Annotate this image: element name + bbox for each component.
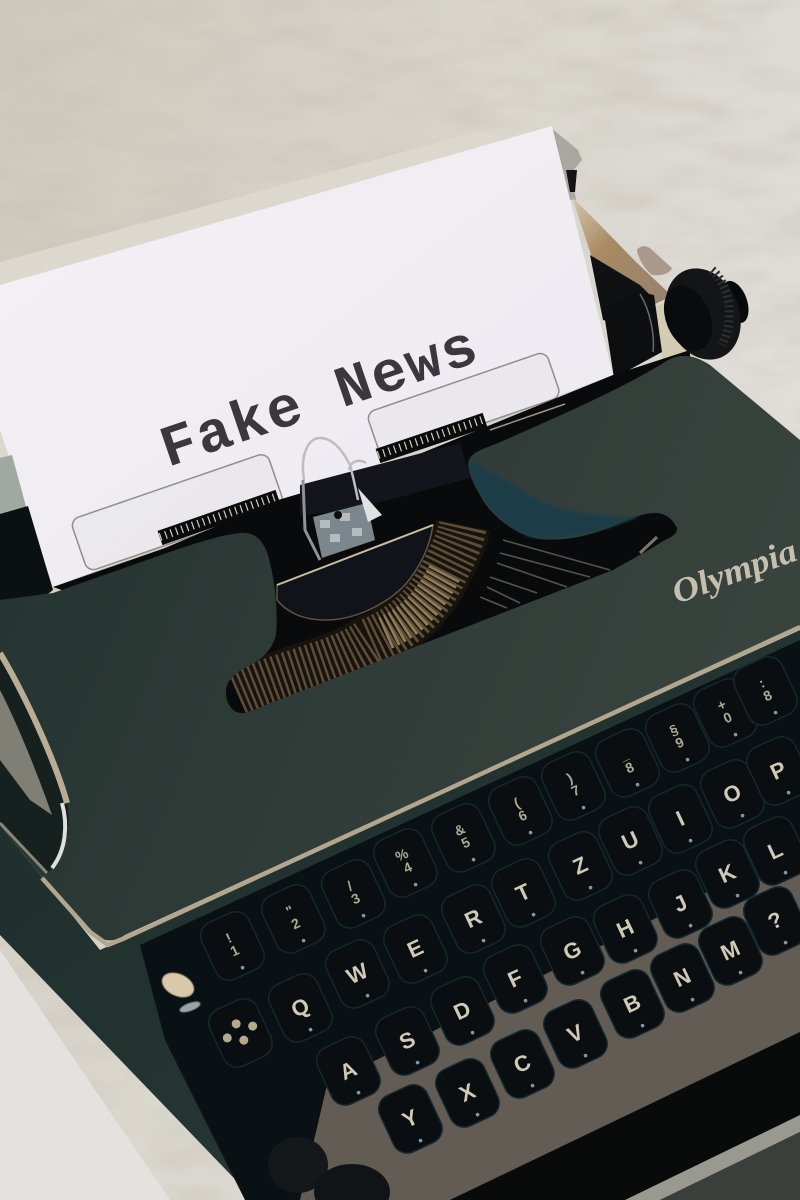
silver paper clip — [303, 438, 382, 560]
keyboard keys: K — [715, 859, 740, 888]
keyboard keys: ( — [511, 794, 522, 811]
keyboard keys: 8 — [623, 758, 637, 776]
keyboard keys: : — [756, 675, 767, 691]
keyboard keys: § — [667, 721, 681, 739]
paper bail combs — [160, 497, 278, 538]
keyboard keys: / — [344, 878, 355, 894]
keyboard keys: H — [613, 914, 638, 943]
keyboard keys: 4 — [401, 858, 415, 876]
number row: ! — [223, 930, 234, 946]
keyboard keys: Z — [569, 851, 592, 880]
keyboard keys: S — [395, 1026, 419, 1055]
lower left keys — [268, 1137, 390, 1200]
keyboard keys: J — [669, 890, 691, 917]
type basket inner plate — [277, 525, 433, 620]
space bar — [450, 1032, 800, 1200]
opening: type basket well — [53, 350, 690, 730]
keyboard keys: D — [450, 996, 475, 1025]
shift lever highlight, left side — [158, 968, 202, 1015]
type bars on the right — [480, 540, 610, 608]
keyboard well — [140, 640, 800, 1200]
platen knob — [652, 257, 754, 371]
keyboard keys: _ — [616, 746, 631, 764]
keyboard keys: P — [766, 756, 790, 785]
keyboard keys: L — [764, 836, 787, 865]
keyboard keys: 9 — [673, 733, 687, 751]
chrome trim strip — [42, 627, 800, 945]
number row — [196, 907, 269, 985]
keyboard keys: ? — [764, 906, 787, 935]
keyboard keys: 7 — [569, 781, 583, 799]
keyboard keys: % — [393, 845, 411, 865]
keyboard keys: 6 — [516, 806, 530, 824]
bottom row — [374, 1080, 447, 1158]
keyboard keys: N — [670, 963, 695, 992]
keyboard keys: Q — [287, 993, 313, 1022]
keyboard keys: 0 — [721, 708, 735, 726]
bottom row: Y — [398, 1104, 422, 1133]
black bail bar — [300, 443, 470, 515]
keyboard keys: W — [343, 958, 372, 989]
paper sheet — [0, 126, 613, 587]
paper guide right — [366, 351, 561, 458]
keyboard keys: " — [283, 902, 296, 919]
cream bracket — [652, 299, 694, 360]
keyboard keys: M — [717, 935, 744, 966]
keyboard keys: I — [672, 806, 688, 831]
chrome latch — [637, 246, 672, 275]
keyboard keys: G — [559, 936, 585, 965]
keyboard keys: V — [563, 1019, 587, 1048]
keyboard keys: C — [510, 1049, 535, 1078]
headline: Fake News: Fake News — [153, 316, 486, 484]
paper guide left — [70, 452, 285, 572]
keyboard keys: 8 — [761, 686, 775, 704]
keyboard keys: T — [512, 878, 535, 907]
teal textured lip of right cover — [469, 460, 640, 538]
chrome front trim, bottom right — [625, 1115, 800, 1200]
paper backing table — [0, 131, 560, 470]
type basket fan — [238, 525, 463, 695]
brass carriage arm — [572, 197, 672, 304]
keyboard keys: B — [620, 989, 645, 1018]
metal plate under keys — [300, 845, 800, 1200]
chrome paper clamp — [550, 127, 582, 200]
Olympia logo: Olympia — [667, 532, 800, 612]
number row: 1 — [228, 941, 242, 959]
chrome carriage handle — [0, 653, 69, 873]
keyboard keys: 2 — [289, 914, 303, 932]
keyboard keys: 5 — [459, 833, 473, 851]
left platen end — [0, 455, 53, 606]
keyboard keys: X — [455, 1078, 479, 1107]
keyboard keys: 3 — [349, 889, 363, 907]
main cover — [0, 356, 800, 940]
keyboard keys: R — [461, 904, 486, 933]
home row — [312, 1032, 385, 1110]
roller mechanism — [550, 127, 754, 378]
keyboard keys: E — [403, 934, 427, 963]
platen — [603, 292, 662, 378]
keyboard keys: + — [715, 696, 729, 714]
top letter row — [204, 994, 277, 1072]
keyboard keys: F — [504, 964, 527, 993]
keyboard keys: ) — [564, 770, 575, 786]
keyboard keys: U — [618, 826, 643, 855]
home row: A — [336, 1056, 361, 1085]
keyboard keys: O — [719, 779, 745, 808]
keyboard keys — [196, 652, 800, 1158]
keyboard keys: & — [452, 820, 468, 839]
typewriter lower body — [0, 630, 800, 1200]
